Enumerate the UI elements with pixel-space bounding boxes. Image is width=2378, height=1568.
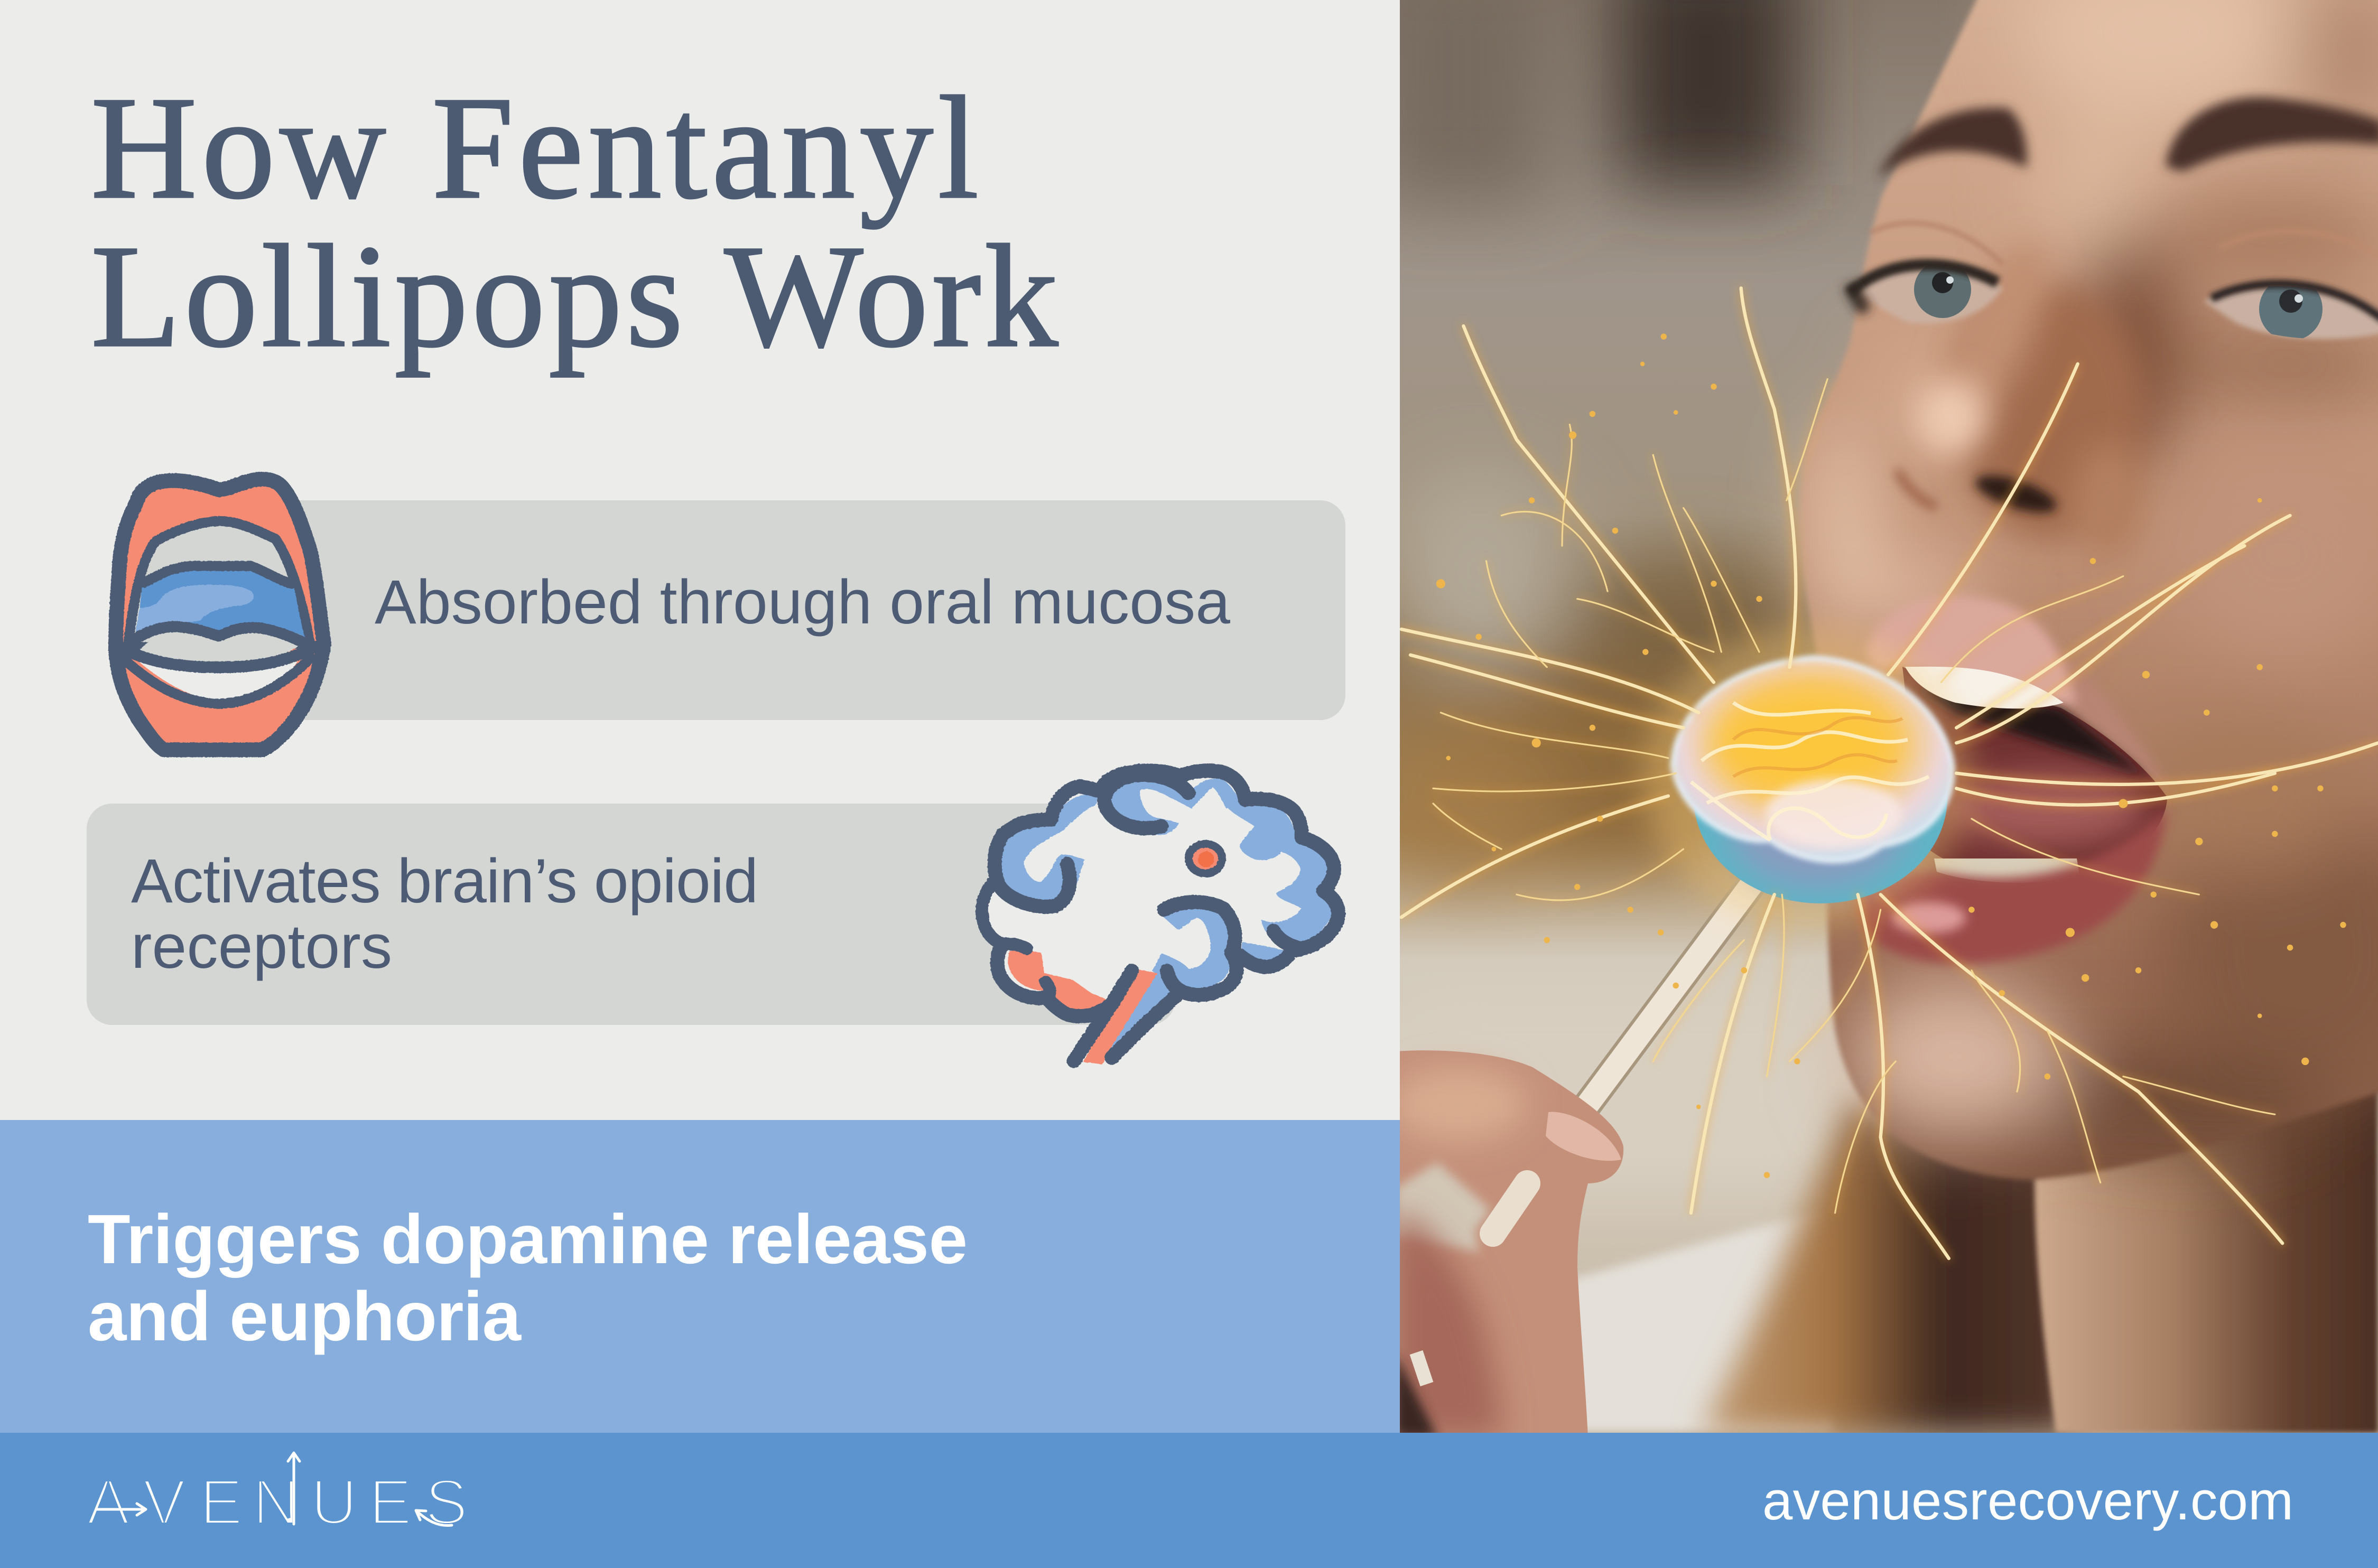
icon: brain — [982, 771, 1339, 1065]
text: dopamine callout: Triggers dopamine release — [88, 1200, 968, 1278]
panel: triggers dopamine release — [0, 1120, 1400, 1434]
hand holding stick — [1390, 1050, 1623, 1437]
text: dopamine callout — [88, 1200, 968, 1355]
face — [1800, 0, 2378, 1180]
title: How Fentanyl — [91, 67, 979, 229]
card: step 2 background — [87, 804, 1175, 1025]
panel: footer bar — [0, 1433, 2378, 1568]
icon: logo arrows — [97, 1453, 452, 1526]
neck — [2035, 1083, 2378, 1433]
nose — [1897, 227, 2145, 560]
panel: step 2 activates brain opioid receptors — [87, 771, 1339, 1065]
panel: step 1 absorbed through oral mucosa — [116, 479, 1345, 750]
lollipop stick — [1588, 866, 1765, 1104]
text: dopamine callout: and euphoria — [88, 1277, 522, 1355]
hair — [1702, 1099, 2072, 1433]
photo background — [1374, 0, 2378, 1433]
text: step 2: Activates brain’s opioid — [131, 846, 758, 916]
text: website url: avenuesrecovery.com — [1762, 1470, 2293, 1531]
panel: left background — [0, 0, 1400, 1120]
text: step 2: receptors — [131, 912, 392, 982]
photo: woman with glowing brain lollipop — [1374, 0, 2378, 1437]
title — [91, 67, 1058, 378]
title: Lollipops Work — [91, 215, 1058, 378]
eyebrows — [1877, 97, 2378, 179]
text: step 1: Absorbed through oral mucosa — [375, 567, 1230, 637]
golden particles — [1436, 333, 2346, 1178]
card: step 1 background — [159, 500, 1345, 720]
eyes — [1850, 223, 2378, 341]
shirt — [1564, 1210, 1834, 1433]
logo: Avenues wordmark: AVENUES — [87, 1466, 468, 1538]
neural filaments — [1401, 288, 2378, 1258]
lollipop brain — [1643, 629, 1971, 925]
icon: open mouth — [116, 479, 324, 750]
mouth and lips — [1855, 596, 2172, 964]
text: step 2 — [131, 846, 758, 982]
